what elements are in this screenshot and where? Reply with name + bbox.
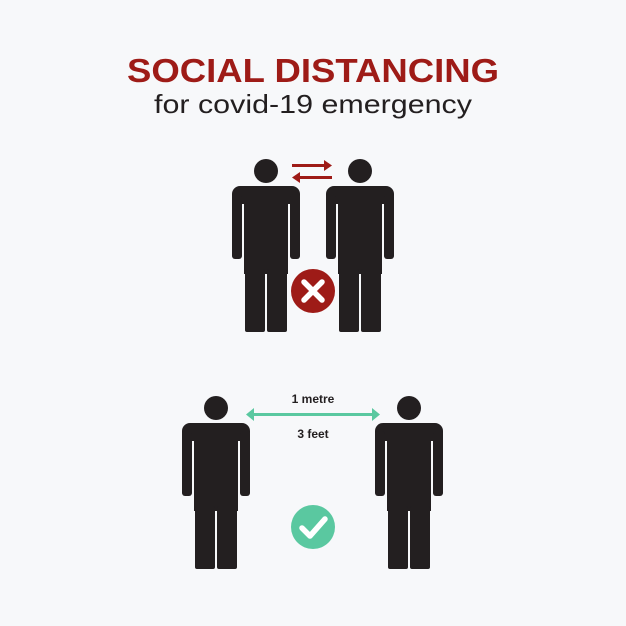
arrows: red exchange: [292, 160, 332, 183]
person: bottom right: [375, 396, 443, 569]
arrow: green distance: [246, 408, 380, 421]
icon: red cross: [291, 269, 335, 313]
panel: safe distance: [182, 392, 443, 569]
person: top left: [232, 159, 300, 332]
label: 1 metre: 1 metre: [292, 392, 335, 406]
title: SOCIAL DISTANCING: [127, 52, 499, 89]
subtitle: for covid-19 emergency: [154, 89, 472, 119]
label: 3 feet: 3 feet: [297, 427, 329, 441]
person: bottom left: [182, 396, 250, 569]
panel: too close: [232, 159, 394, 332]
icon: green check: [291, 505, 335, 549]
person: top right: [326, 159, 394, 332]
